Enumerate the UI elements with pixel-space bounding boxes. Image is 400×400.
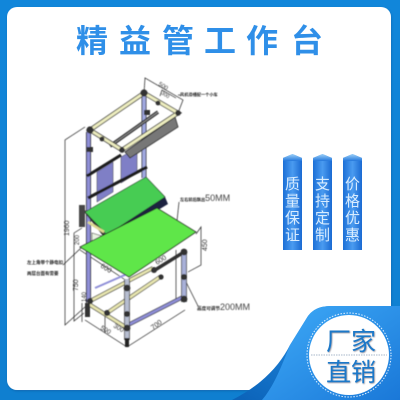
title: 精益管工作台: [76, 23, 323, 59]
dimension numbers: 600: [154, 255, 168, 267]
pillar: customization: [313, 154, 332, 250]
dimension lines: [63, 78, 201, 347]
dimension numbers: 1960: [64, 220, 71, 236]
dimension numbers: 450: [202, 239, 209, 251]
upper green shelf: [85, 177, 168, 241]
pillar: customization: 支持定制: [315, 176, 330, 244]
lower frame connectors: [85, 249, 187, 331]
pillar: price: 价格优惠: [345, 176, 360, 244]
top frame tubes: [90, 93, 178, 150]
dimension numbers: 200: [75, 234, 81, 245]
corner badge: [232, 306, 400, 400]
lower rails and legs: [87, 250, 184, 347]
annotation: static buckle: [27, 259, 63, 277]
hanging grey board: [124, 115, 178, 158]
pillar: price: [343, 154, 362, 250]
lower green worktop: [80, 208, 196, 277]
dimension numbers: 300: [112, 323, 125, 334]
purple back panels: [97, 148, 137, 202]
dimension numbers: 700: [150, 319, 164, 332]
annotation: fan rail: 风机滑槽配一个小车: [180, 91, 218, 98]
side bracket: [79, 205, 108, 249]
pillar: quality: 质量保证: [285, 176, 300, 244]
dimension numbers: 600: [99, 263, 113, 275]
black cross bars: [87, 155, 147, 198]
dimension numbers: 300: [160, 91, 170, 100]
dimension numbers: 500: [99, 325, 112, 336]
workbench diagram: [27, 78, 250, 347]
dimension numbers: 140: [82, 291, 88, 302]
uprights: [88, 94, 144, 304]
annotation: adjustable height: 高度可调节200MM: [197, 302, 250, 312]
annotation: static buckle: 两层台面有需要: [27, 270, 59, 277]
annotation: overhang: 左右前后飘出50MM: [180, 193, 230, 203]
dimension numbers: 750: [73, 279, 80, 291]
dimension numbers: 500: [157, 82, 169, 92]
annotation: static buckle: 左上角带个静电扣: [27, 259, 63, 266]
corner badge: 直销: [326, 359, 376, 387]
inner slide rails: [110, 112, 158, 146]
dimension numbers: [64, 82, 209, 336]
top frame connectors: [86, 89, 181, 153]
corner badge: 厂家: [326, 328, 376, 356]
pillar: quality: [283, 154, 302, 250]
